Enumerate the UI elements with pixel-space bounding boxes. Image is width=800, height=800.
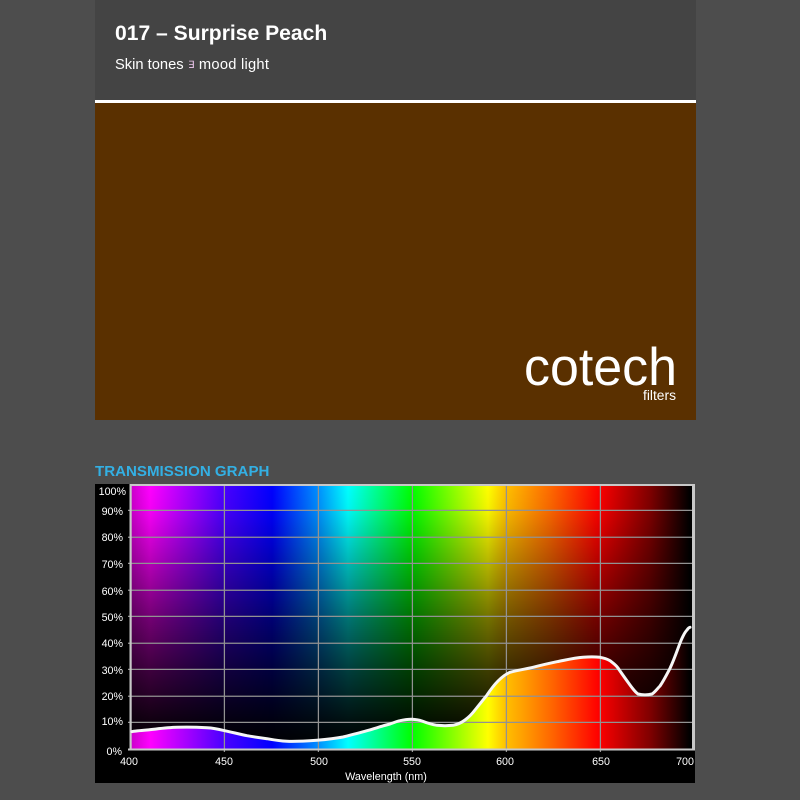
x axis labels: 600 — [496, 756, 514, 768]
logo: cotech filters: filters — [643, 388, 676, 403]
x axis labels — [120, 756, 694, 768]
y axis labels: 50% — [102, 612, 123, 624]
white divider — [95, 100, 696, 103]
x axis labels: 400 — [120, 756, 138, 768]
transmission graph — [95, 484, 695, 783]
y axis labels: 60% — [102, 586, 123, 598]
plot frame — [128, 484, 695, 750]
transmission curve — [132, 627, 690, 741]
y axis labels: 70% — [102, 559, 123, 571]
header panel — [95, 0, 696, 100]
transmitted area under curve — [132, 636, 687, 748]
y axis labels: 40% — [102, 638, 123, 650]
x axis labels: 650 — [592, 756, 610, 768]
grid lines — [128, 486, 692, 752]
x axis labels: 450 — [215, 756, 233, 768]
y axis labels: 100% — [99, 486, 126, 498]
graph heading: TRANSMISSION GRAPH — [95, 463, 269, 480]
graph background — [95, 484, 695, 783]
y axis labels: 20% — [102, 691, 123, 703]
x axis labels: 500 — [310, 756, 328, 768]
logo: cotech filters: cotech — [524, 338, 677, 397]
x axis labels: 550 — [403, 756, 421, 768]
y axis labels: 90% — [102, 506, 123, 518]
title: 017 – Surprise Peach — [115, 22, 327, 45]
y axis labels: 0% — [107, 746, 122, 758]
colour swatch panel — [95, 103, 696, 420]
y axis labels — [99, 486, 126, 758]
y axis labels: 10% — [102, 716, 123, 728]
y axis labels: 30% — [102, 665, 123, 677]
x axis labels: 700 — [676, 756, 694, 768]
subtitle: Skin tones ∃ mood light — [115, 57, 269, 73]
spectrum field dimmed — [130, 486, 692, 749]
x axis title: Wavelength (nm) — [345, 771, 427, 783]
y axis labels: 80% — [102, 532, 123, 544]
